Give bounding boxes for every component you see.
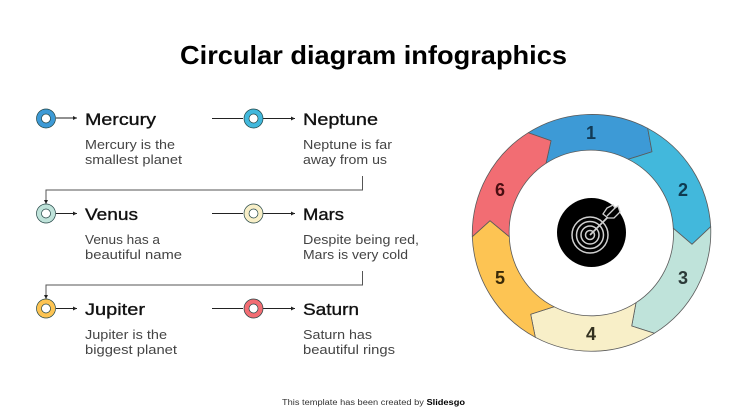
segment numbers: 4 <box>586 324 596 344</box>
item: Mercury: smallest planet <box>85 153 183 167</box>
item: Mercury: Mercury <box>85 110 157 129</box>
segment 1 <box>528 114 652 163</box>
segment 2 <box>628 128 711 244</box>
connector: Neptune to Venus <box>46 176 362 204</box>
item: Jupiter: Jupiter is the <box>85 328 167 342</box>
title: Circular diagram infographics <box>180 40 567 70</box>
item: Venus <box>36 204 182 262</box>
item: Mercury <box>36 109 183 167</box>
segment 3 <box>632 227 711 333</box>
segment numbers: 5 <box>495 268 505 288</box>
segment numbers: 2 <box>678 180 688 200</box>
segment numbers: 3 <box>678 268 688 288</box>
item: Jupiter <box>36 299 178 357</box>
segment numbers <box>495 123 688 344</box>
icon: target with arrow <box>557 198 626 267</box>
item: Neptune: away from us <box>303 153 387 167</box>
circular diagram <box>472 114 711 351</box>
item: Saturn: beautiful rings <box>303 343 395 357</box>
item: Saturn: Saturn <box>303 300 359 319</box>
segment 6 <box>472 133 551 237</box>
item: Venus: Venus has a <box>85 233 160 247</box>
item: Neptune: Neptune <box>303 110 378 129</box>
item: Venus: Venus <box>85 205 138 224</box>
item: Neptune <box>212 109 392 167</box>
item: Jupiter: biggest planet <box>85 343 178 357</box>
item: Mars <box>212 204 419 262</box>
segment 4 <box>531 303 654 351</box>
segment numbers: 1 <box>586 123 596 143</box>
item: Mars: Mars is very cold <box>303 248 408 262</box>
item: Mars: Mars <box>303 205 344 224</box>
segment 5 <box>472 221 554 337</box>
item: Mars: Despite being red, <box>303 233 419 247</box>
connector: Mars to Jupiter <box>46 271 362 299</box>
item: Mercury: Mercury is the <box>85 138 175 152</box>
segment numbers: 6 <box>495 180 505 200</box>
item: Saturn <box>212 299 395 357</box>
item: Saturn: Saturn has <box>303 328 372 342</box>
footer credit: This template has been created by Slidesgo <box>282 398 465 407</box>
item: Neptune: Neptune is far <box>303 138 392 152</box>
item: Jupiter: Jupiter <box>85 300 145 319</box>
item: Venus: beautiful name <box>85 248 182 262</box>
